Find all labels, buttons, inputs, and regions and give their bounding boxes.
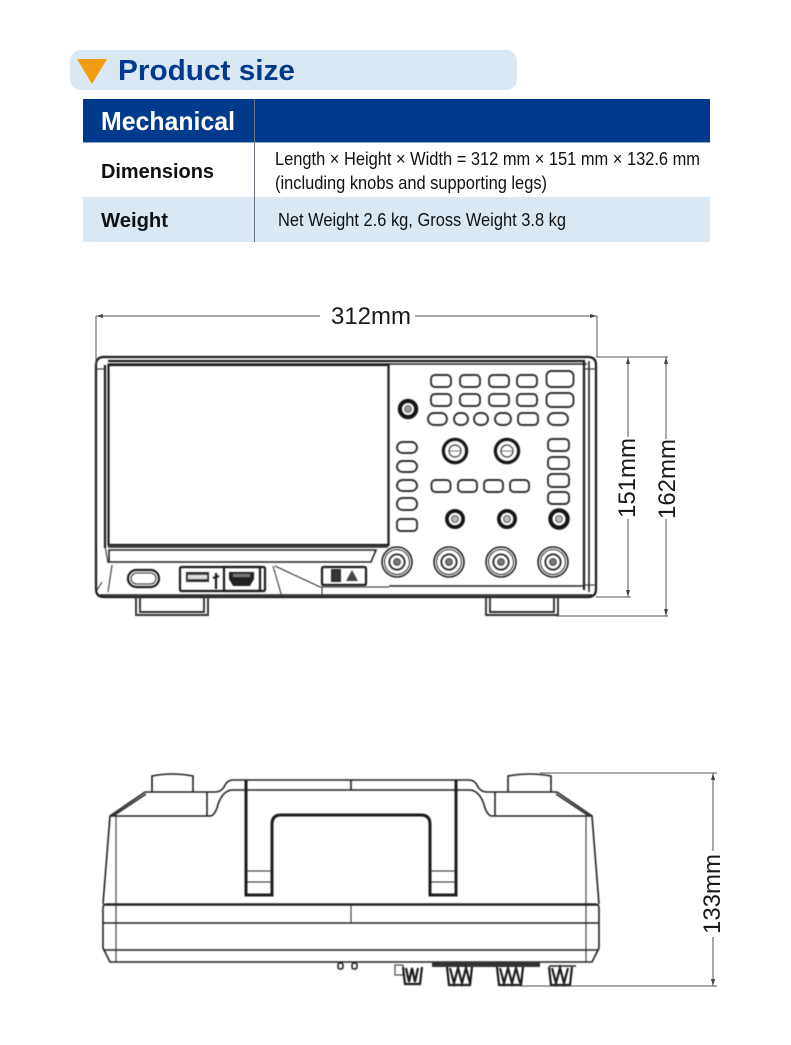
dimension: 312mm width <box>96 303 597 365</box>
feet <box>136 597 558 615</box>
rotary knobs <box>400 401 568 528</box>
dimension: 162mm height <box>556 357 681 616</box>
upper housing <box>103 780 599 904</box>
table: mechanical specifications <box>83 99 710 242</box>
dimension: 133mm depth: 133mm <box>699 854 726 934</box>
power button <box>128 570 159 587</box>
dimension: 312mm width: 312mm <box>331 303 411 330</box>
BNC connectors <box>382 547 568 577</box>
icon: orange triangle <box>77 59 107 84</box>
left rotary knob <box>152 774 193 792</box>
dimension: 133mm depth <box>520 773 726 986</box>
instrument body <box>96 357 596 597</box>
control buttons <box>397 371 574 531</box>
table: mechanical specifications: Length × Height × Width = 312 mm × 151 mm × 132.6 mm <box>275 149 700 169</box>
table: mechanical specifications: Mechanical <box>101 106 235 136</box>
section heading: product size: Product size <box>118 55 295 87</box>
dimension: 151mm height: 151mm <box>614 438 641 518</box>
table: mechanical specifications: Net Weight 2.6 kg, Gross Weight 3.8 kg <box>278 210 566 230</box>
bottom connectors <box>338 962 576 985</box>
front view drawing <box>96 357 596 615</box>
network and ground ports <box>322 567 366 585</box>
dimension: 162mm height: 162mm <box>654 439 681 519</box>
section heading: product size <box>70 50 517 90</box>
strip under screen <box>108 547 388 562</box>
screen <box>108 365 388 545</box>
dimension: 151mm height <box>596 357 668 597</box>
carry handle <box>246 780 456 895</box>
top view drawing <box>103 774 599 985</box>
right rotary knob <box>508 774 551 792</box>
table: mechanical specifications: (including knobs and supporting legs) <box>275 173 547 193</box>
table: mechanical specifications: Weight <box>101 210 168 232</box>
table: mechanical specifications: Dimensions <box>101 161 214 183</box>
base outline <box>103 816 599 962</box>
USB and HDMI ports <box>180 567 265 591</box>
